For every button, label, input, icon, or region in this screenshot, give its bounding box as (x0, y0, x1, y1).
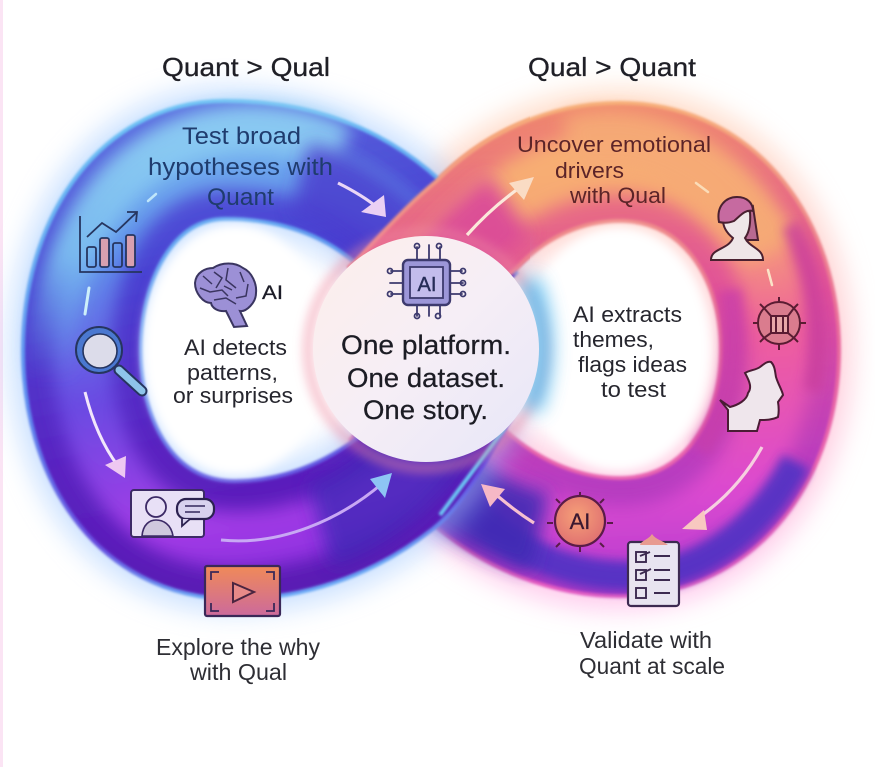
text: AI detects patterns (173, 335, 293, 408)
icon: video chat card (131, 490, 214, 537)
text: explore the why: with Qual (189, 659, 287, 685)
left loop band (50, 128, 505, 540)
arrow: right lower descending (682, 447, 762, 530)
text: validate with quant: Quant at scale (579, 653, 725, 679)
center statement: One story. (363, 395, 488, 425)
icon: AI badge: AI (570, 509, 590, 534)
chip label: AI (418, 274, 436, 296)
text: AI detects patterns: or surprises (173, 383, 293, 408)
center circle rim glow (308, 232, 544, 468)
text: explore the why: Explore the why (156, 634, 320, 660)
text: uncover emotional drivers (517, 132, 711, 208)
text: AI extracts themes (573, 302, 687, 402)
text: validate with quant (579, 627, 725, 679)
text: validate with quant: Validate with (580, 627, 712, 653)
icon: AI chip (388, 244, 466, 318)
icon: AI badge (547, 492, 613, 552)
text: AI detects patterns: patterns, (187, 360, 278, 385)
arrow: upper right rising (467, 177, 534, 235)
center statement (341, 330, 511, 425)
text: AI extracts themes: flags ideas (578, 352, 687, 377)
arrow: left side downward (85, 392, 126, 478)
icon: clipboard checklist (628, 534, 679, 606)
text: test broad hypotheses (148, 123, 333, 211)
arrow: top left (338, 183, 386, 217)
arrow: lower center pointing left (481, 484, 534, 523)
text: test broad hypotheses: Quant (207, 184, 274, 211)
text: AI extracts themes: AI extracts (573, 302, 682, 327)
icon: magnifying glass (76, 327, 142, 391)
text: uncover emotional drivers: Uncover emotional (517, 132, 711, 157)
icon: brain with AI (195, 264, 283, 327)
heading: Quant > Qual: Quant > Qual (162, 52, 330, 82)
text: test broad hypotheses: Test broad (182, 123, 301, 150)
text: test broad hypotheses: hypotheses with (148, 154, 333, 181)
center statement: One dataset. (347, 363, 505, 393)
center circle (313, 236, 539, 462)
heading: Qual > Quant: Qual > Quant (528, 52, 697, 82)
right loop upper overlap (346, 116, 530, 276)
brain AI label: AI (262, 283, 283, 304)
icon: chart with trend arrow (80, 212, 142, 272)
center statement: One platform. (341, 330, 511, 360)
text: uncover emotional drivers: with Qual (569, 183, 666, 208)
motion dashes (85, 183, 772, 314)
right loop lower layer (390, 140, 817, 576)
icon: video play frame (205, 566, 280, 616)
text: AI extracts themes: to test (601, 377, 666, 402)
arrow: bottom left rising (221, 473, 392, 541)
text: uncover emotional drivers: drivers (555, 158, 624, 183)
hole whites (143, 225, 710, 475)
text: AI detects patterns: AI detects (184, 335, 287, 360)
icon: face profile (720, 362, 783, 431)
text: AI extracts themes: themes, (573, 327, 654, 352)
text: explore the why (156, 634, 320, 685)
icon: woman bust (711, 197, 763, 260)
icon: wheel (753, 297, 806, 350)
